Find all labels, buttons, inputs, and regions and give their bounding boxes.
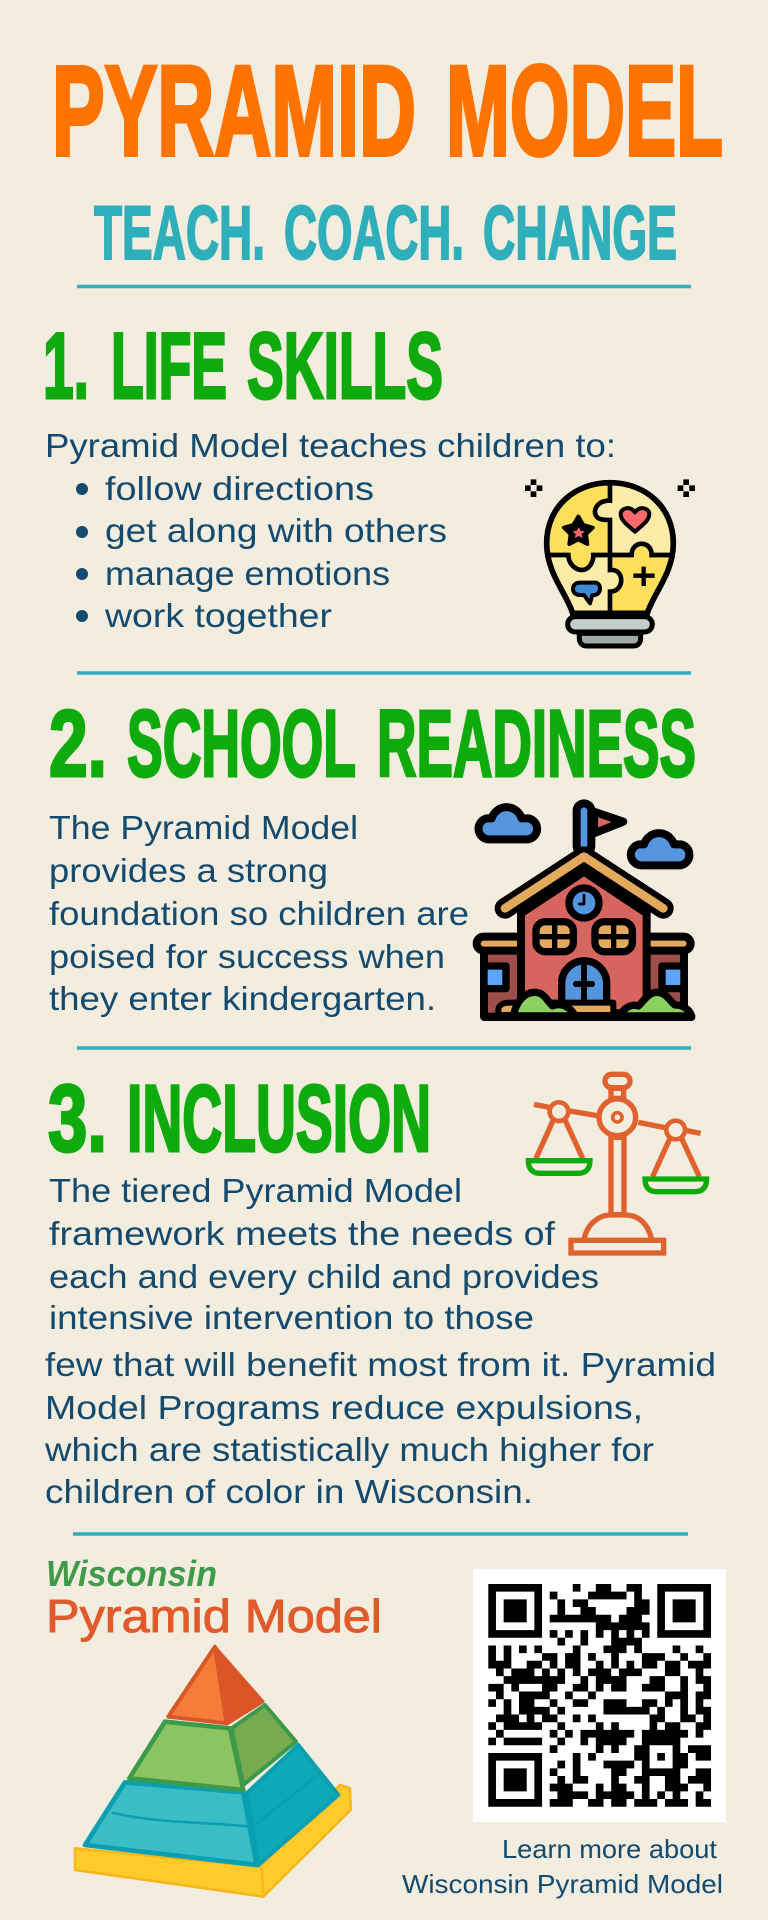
bullet list: work together <box>104 597 332 634</box>
icon: balance scales <box>528 1074 707 1253</box>
text block: inclusion <box>44 1172 716 1510</box>
heading: 1. life skills: LIFE <box>111 313 227 418</box>
logo: layered pyramid <box>75 1647 351 1897</box>
text block: school readiness: The Pyramid Model <box>49 809 358 846</box>
text block: school readiness: they enter kindergarten. <box>49 980 436 1017</box>
logo: Wisconsin Pyramid Model wordmark: Wisconsin <box>46 1553 217 1594</box>
subtitle: TEACH. <box>94 191 265 276</box>
subtitle <box>94 191 677 276</box>
icon: school house <box>477 803 692 1017</box>
text block: school readiness: foundation so children are <box>49 895 469 932</box>
heading: 2. school readiness <box>49 691 696 797</box>
text block: life skills <box>45 427 616 634</box>
heading: 1. life skills: 1. <box>43 313 89 418</box>
text block: inclusion: Model Programs reduce expulsions, <box>45 1389 643 1426</box>
heading: 3. inclusion: INCLUSION <box>127 1066 431 1172</box>
subtitle: COACH. <box>284 191 464 276</box>
logo: Wisconsin Pyramid Model wordmark: Pyramid Model <box>46 1590 382 1642</box>
logo: Wisconsin Pyramid Model wordmark <box>46 1553 382 1642</box>
heading: 3. inclusion: 3. <box>48 1066 107 1172</box>
heading: 3. inclusion <box>48 1066 431 1172</box>
title: PYRAMID <box>52 40 416 183</box>
heading: 2. school readiness: SCHOOL <box>127 691 356 797</box>
QR caption: Learn more about <box>502 1834 718 1864</box>
text block: inclusion: children of color in Wisconsin. <box>45 1473 533 1510</box>
heading: 1. life skills <box>43 313 443 418</box>
bullet list: follow directions <box>105 470 374 507</box>
text block: school readiness: poised for success when <box>49 938 445 975</box>
QR code <box>473 1569 726 1822</box>
bullet list <box>76 470 447 634</box>
QR caption: Wisconsin Pyramid Model <box>402 1869 723 1899</box>
text block: school readiness <box>49 809 469 1017</box>
icon: puzzle light bulb <box>525 479 695 646</box>
heading: 2. school readiness: 2. <box>49 691 107 797</box>
text block: school readiness: provides a strong <box>49 852 328 889</box>
text block: inclusion: each and every child and provides <box>49 1258 599 1295</box>
bullet list: manage emotions <box>105 555 390 592</box>
bullet list: get along with others <box>105 512 447 549</box>
heading: 1. life skills: SKILLS <box>247 313 443 418</box>
text block: inclusion: The tiered Pyramid Model <box>49 1172 462 1209</box>
text block: inclusion: which are statistically much higher for <box>44 1431 654 1468</box>
QR caption <box>402 1834 723 1899</box>
text block: inclusion: intensive intervention to those <box>49 1299 534 1336</box>
text block: life skills: Pyramid Model teaches children to: <box>45 427 616 464</box>
text block: inclusion: framework meets the needs of <box>49 1215 556 1252</box>
text block: inclusion: few that will benefit most from it. Pyramid <box>45 1346 716 1383</box>
